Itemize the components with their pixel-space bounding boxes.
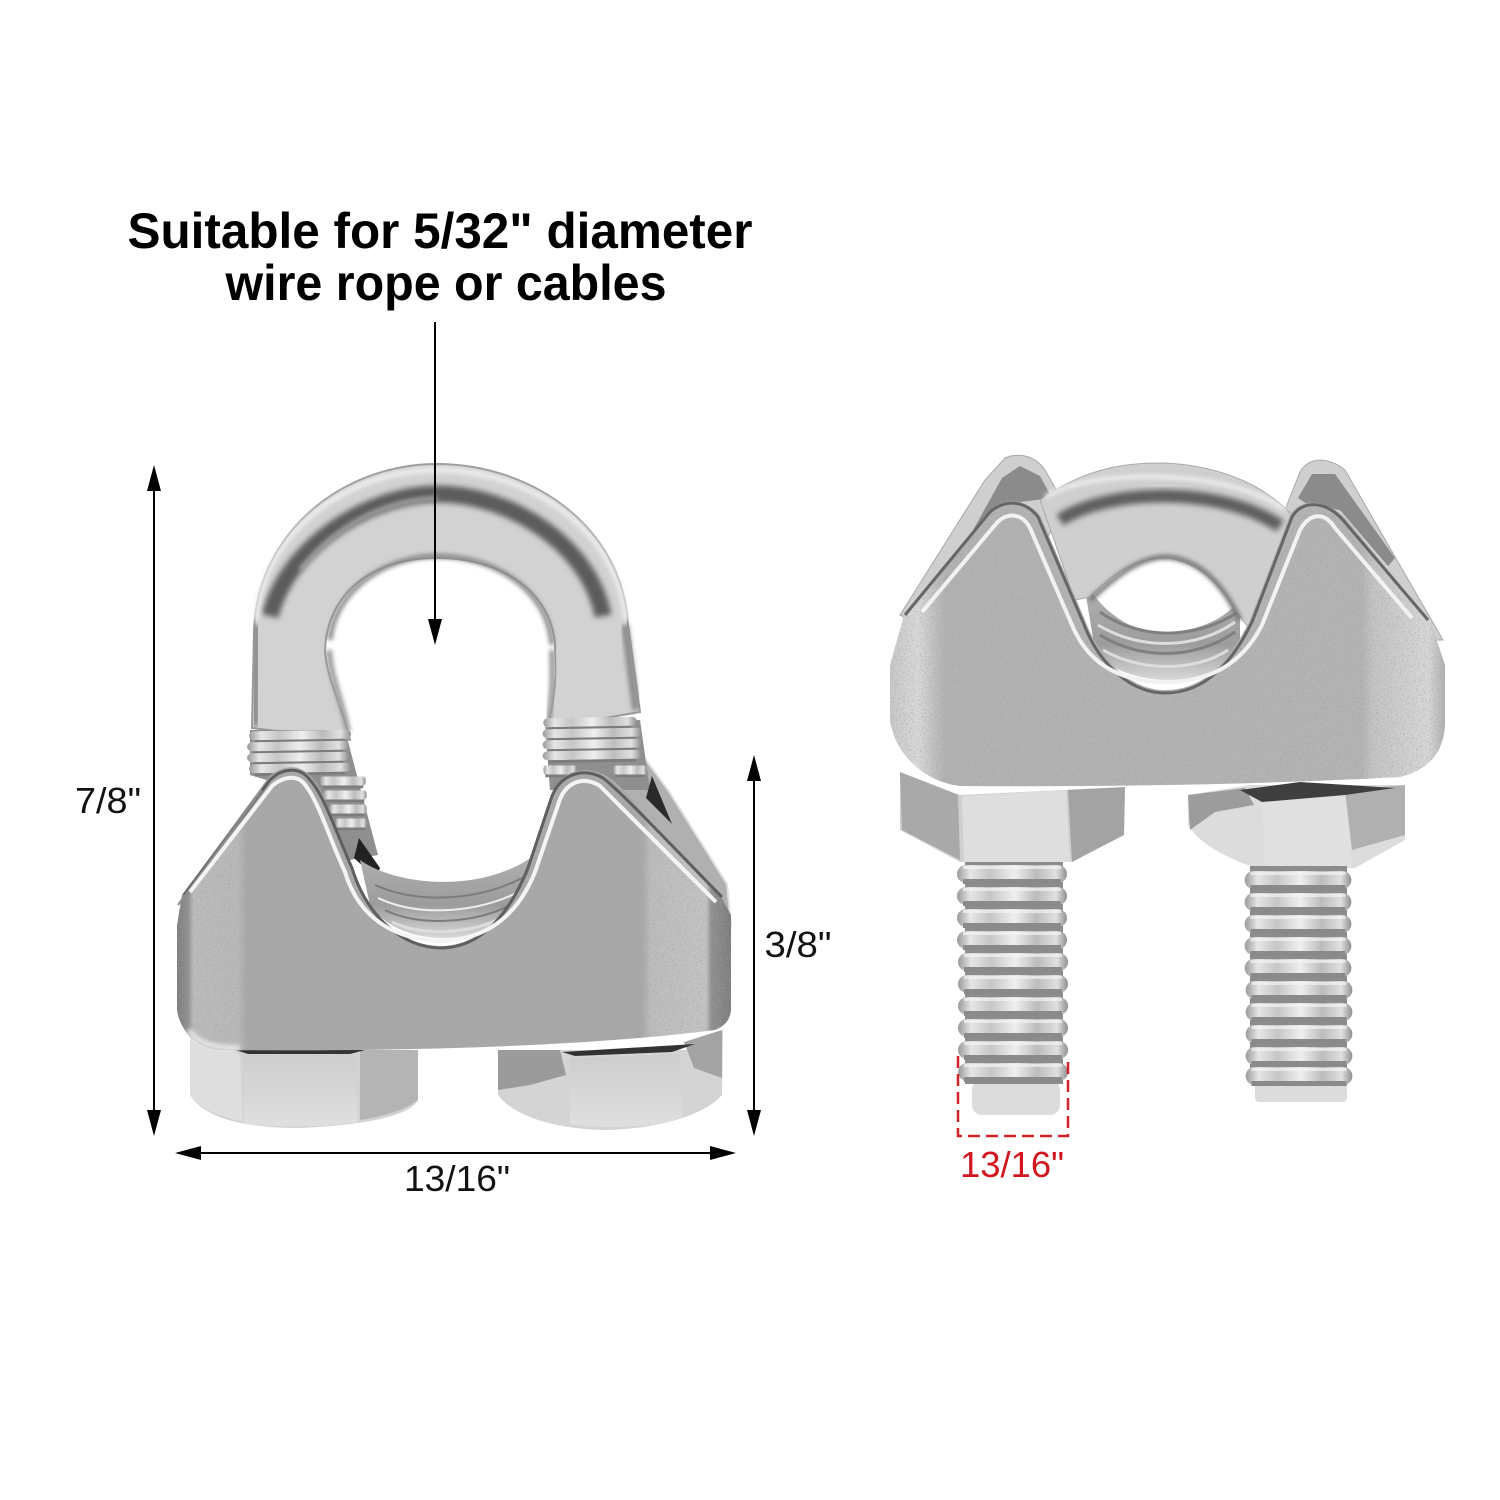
label: 13/16 width: 13/16" xyxy=(404,1158,510,1199)
right clamp: rear view xyxy=(890,455,1445,1115)
right threads xyxy=(543,717,672,824)
right nut xyxy=(1188,782,1405,870)
back saddle plate xyxy=(600,752,731,925)
arrow: cable pointer xyxy=(428,322,442,645)
left threaded shank xyxy=(957,862,1068,1115)
heading: cable suitability: wire rope or cables xyxy=(225,255,667,311)
wire rope hole xyxy=(1092,558,1236,632)
label: 13/16 thread: 13/16" xyxy=(960,1144,1064,1185)
arrow: height 3/8 xyxy=(747,755,761,1136)
back saddle plate xyxy=(900,455,1443,640)
right nut xyxy=(498,1030,723,1130)
U-bolt xyxy=(252,464,640,740)
heading: cable suitability: Suitable for 5/32" diameter xyxy=(128,203,752,259)
heading: cable suitability xyxy=(128,203,752,311)
label: 3/8: 3/8" xyxy=(764,924,832,965)
wire groove texture xyxy=(360,855,535,938)
left threads xyxy=(247,730,380,878)
bracket: thread diameter xyxy=(958,1056,1068,1136)
label: 7/8: 7/8" xyxy=(75,780,141,821)
arrow: width 13/16 xyxy=(175,1146,736,1160)
slot in back plate xyxy=(646,776,672,824)
right threaded shank xyxy=(1245,866,1352,1102)
U-bolt xyxy=(1040,463,1292,640)
left nut xyxy=(190,1035,418,1128)
left clamp: front view xyxy=(177,464,731,1130)
arrow: height 7/8 xyxy=(147,465,161,1136)
front saddle plate xyxy=(890,501,1445,786)
front saddle plate xyxy=(177,767,731,1050)
left nut xyxy=(900,772,1125,862)
wire groove texture xyxy=(1085,590,1240,680)
